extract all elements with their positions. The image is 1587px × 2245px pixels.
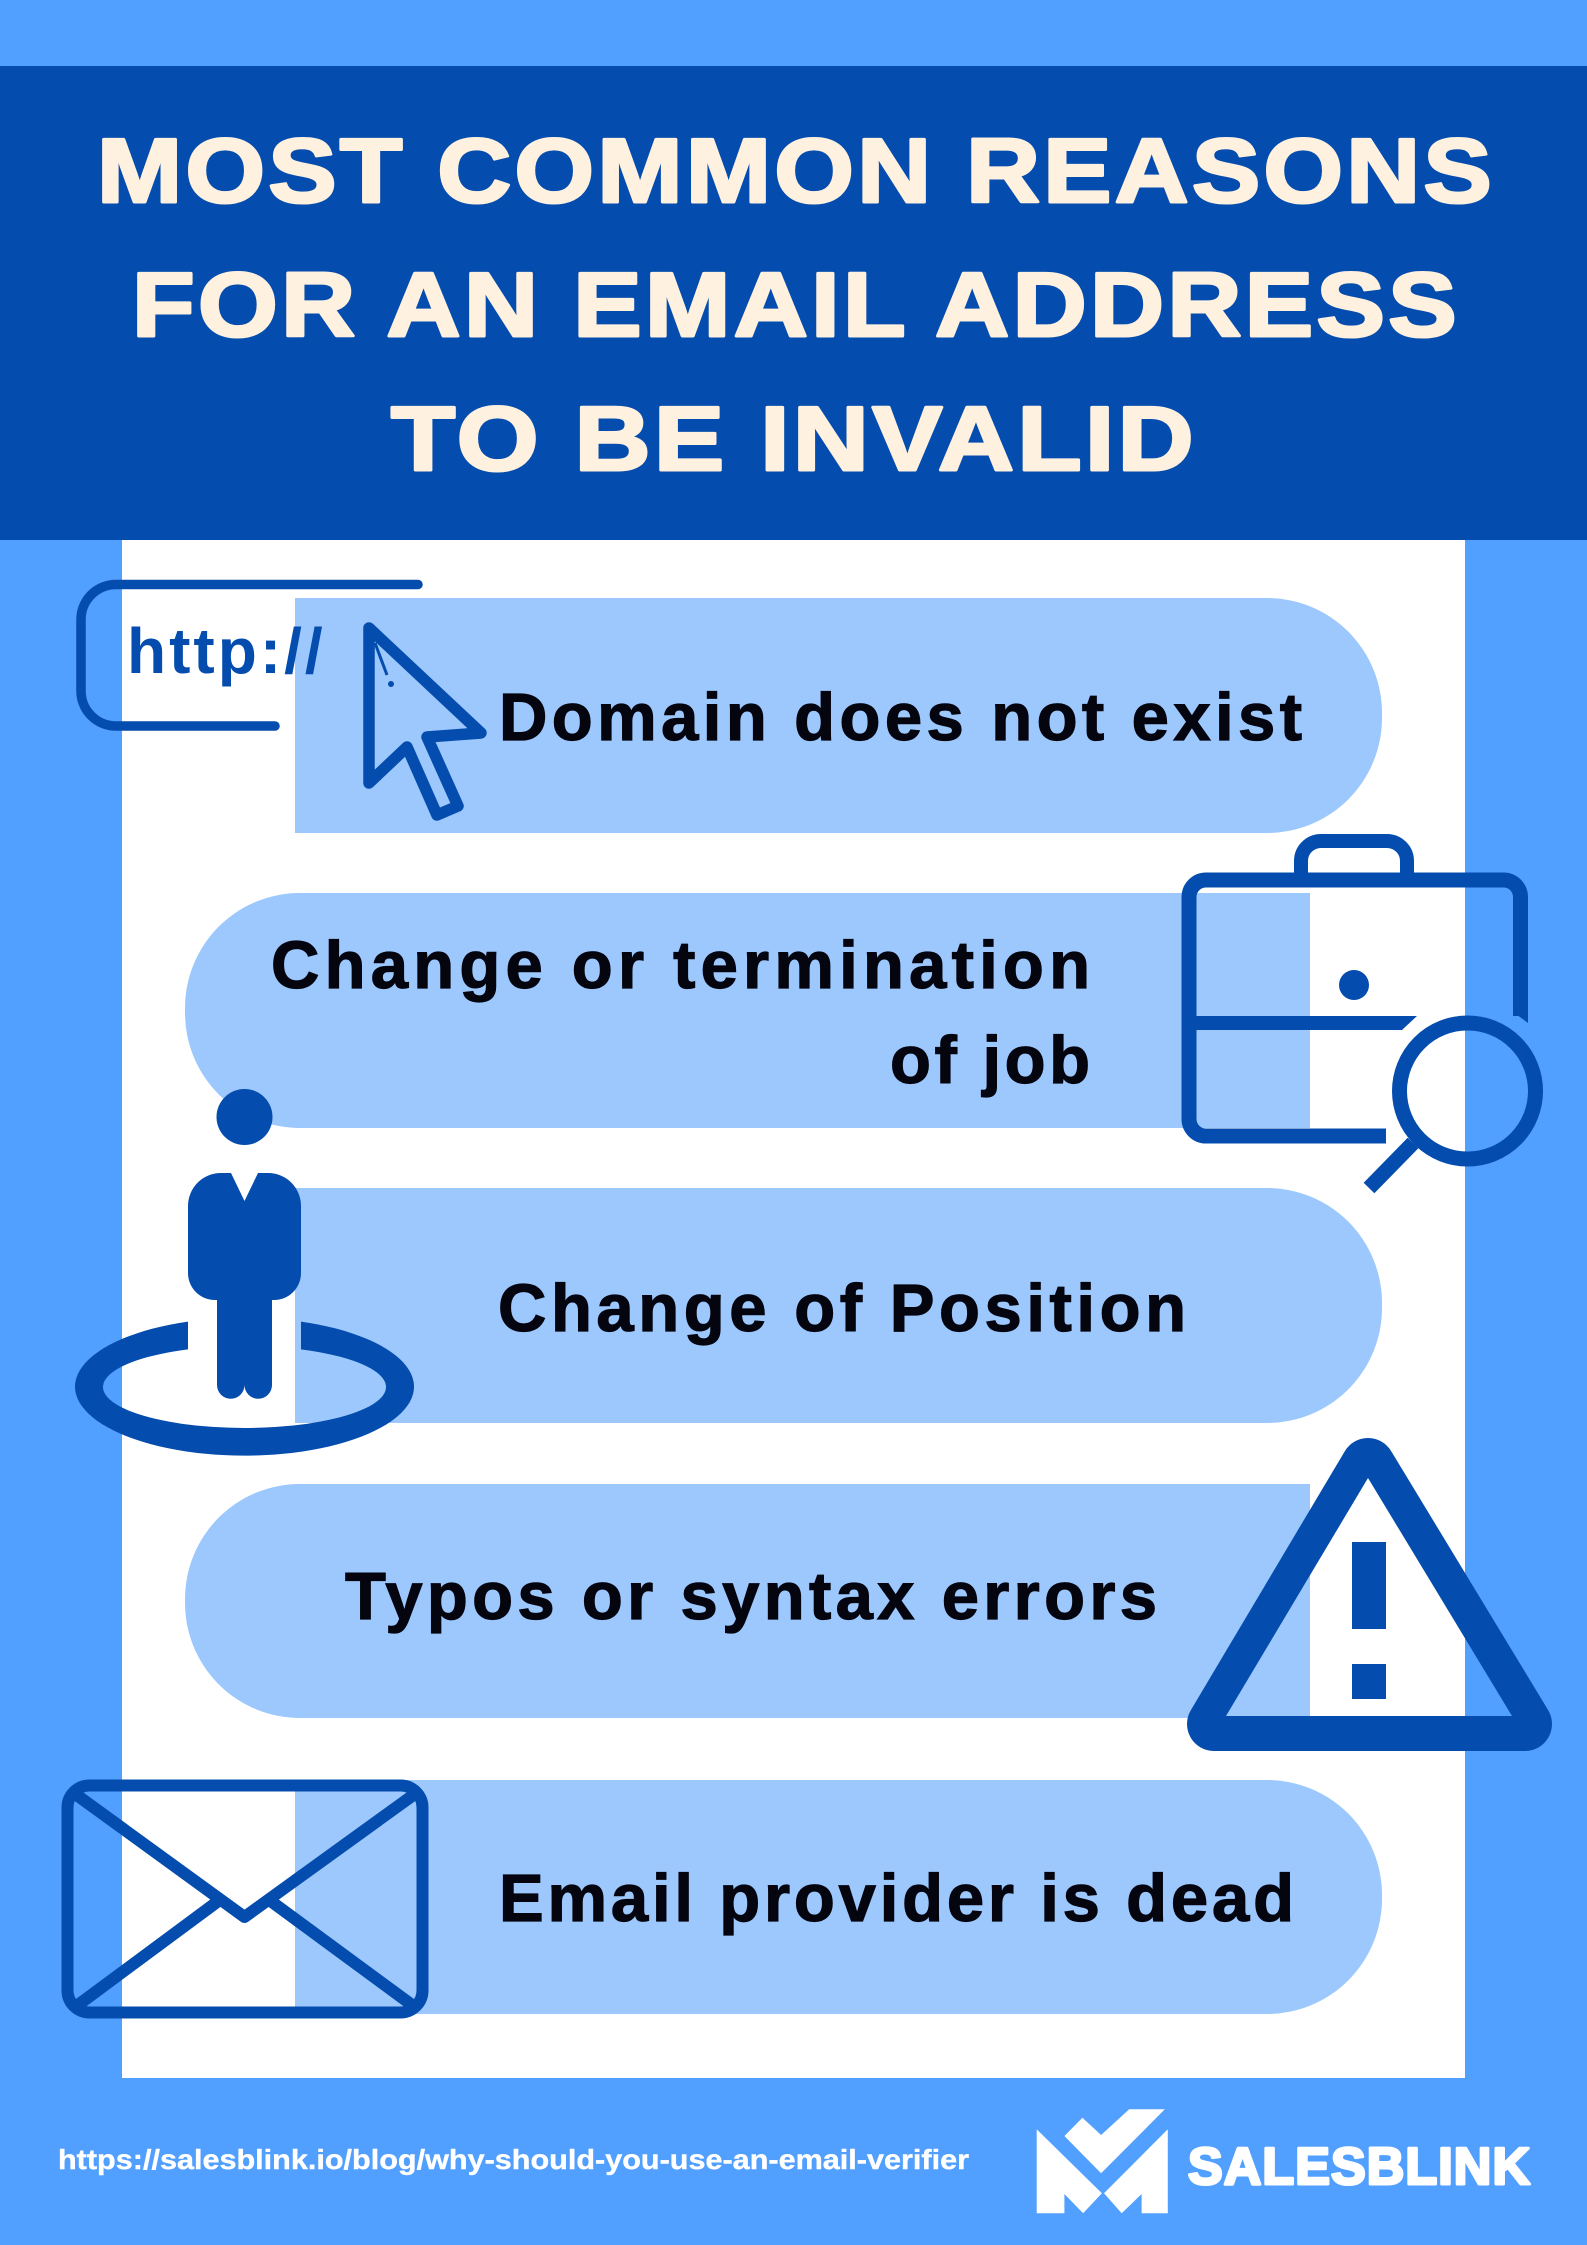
reason 2: change or termination of job: of job — [890, 1023, 1090, 1098]
header banner with title: TO BE INVALID — [391, 389, 1197, 490]
salesblink logo — [1037, 2109, 1530, 2213]
salesblink logo: SALESBLINK — [1188, 2138, 1530, 2196]
header banner with title — [0, 66, 1587, 540]
icon: http address with cursor: http:// — [127, 615, 326, 687]
reason 2: change or termination of job — [185, 893, 1310, 1128]
reason 1: domain does not exist: Domain does not exist — [499, 680, 1302, 755]
footer url: https://salesblink.io/blog/why-should-you-use-an-email-verifier — [58, 2144, 969, 2175]
reason 3: change of position: Change of Position — [498, 1271, 1186, 1346]
icon: envelope — [68, 1786, 422, 2012]
icon: http address with cursor — [81, 584, 481, 815]
icon: person standing in ring — [75, 1089, 414, 1456]
white content panel — [122, 540, 1465, 2078]
reason 5: email provider is dead: Email provider is dead — [499, 1861, 1294, 1936]
reason 5: email provider is dead — [295, 1780, 1382, 2014]
header banner with title: FOR AN EMAIL ADDRESS — [132, 255, 1460, 356]
reason 4: typos or syntax errors: Typos or syntax errors — [345, 1559, 1157, 1634]
header banner with title: MOST COMMON REASONS — [97, 121, 1495, 222]
reason 1: domain does not exist — [295, 598, 1382, 833]
icon: warning triangle — [1187, 1438, 1552, 1751]
reason 3: change of position — [295, 1188, 1382, 1423]
reason 4: typos or syntax errors — [185, 1484, 1310, 1718]
reason 2: change or termination of job: Change or termination — [271, 928, 1090, 1003]
icon: briefcase with magnifier — [1189, 841, 1536, 1188]
